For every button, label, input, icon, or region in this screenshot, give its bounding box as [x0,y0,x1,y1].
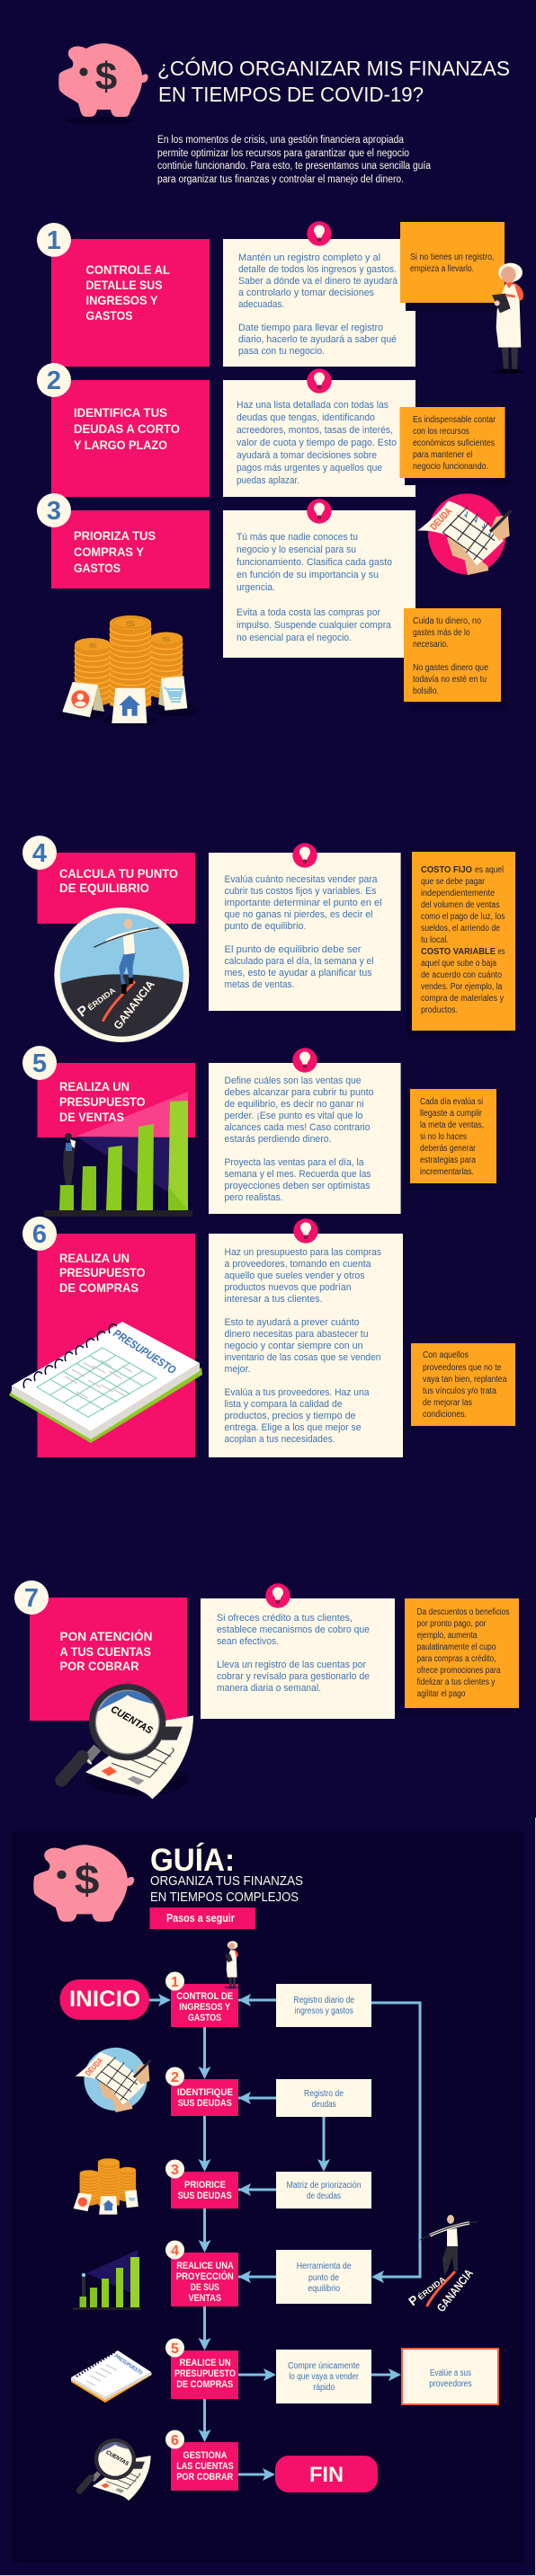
panel: step 3 text: Evita a toda costa las compras por [237,607,380,618]
callout: step 3: necesario. [413,640,448,650]
icon: small budget notebook [71,2350,152,2403]
callout: step 7: ofrece promociones para [417,1666,501,1676]
flow step 5: REALICE UN [180,2358,231,2368]
callout: step 4 [406,852,515,1038]
flow note 3: de deudas [307,2191,341,2201]
panel: step 1 text: pasa con tu negocio. [238,346,325,357]
end pill: FIN [309,2463,344,2487]
icon: small balance walker: P [406,2292,421,2308]
flow step 6: POR COBRAR [176,2472,233,2483]
callout: step 6: vaya tan bien, replantea [423,1375,507,1385]
flow note 5: lo que vaya a vender [289,2372,359,2382]
intro text: En los momentos de crisis, una gestión financiera apropiada [157,135,405,146]
panel: step 5 text: proyecciones deben ser optimistas [225,1181,371,1191]
callout: step 7: por pronto pago, por [417,1619,487,1629]
panel: step 5 heading: DE VENTAS [59,1110,124,1124]
panel: step 7 heading: 7 [24,1584,39,1613]
panel: step 4 text: mes, esto te ayudar a planificar tus [225,968,372,978]
panel: step 2 text: puedas aplazar. [237,475,299,486]
flow step 4: REALICE UNA [176,2261,234,2271]
flow step 3 [165,2160,238,2209]
intro text: permite optimizar los recursos para garantizar que el negocio [157,148,409,159]
callout: step 1: empieza a llevarlo. [410,264,474,274]
icon: small budget notebook: PRESUPUESTO [113,2354,143,2377]
panel: step 4 text: punto de equilibrio. [225,921,306,932]
panel: step 2 text: deudas que tengas, identificando [237,412,375,423]
panel: step 4 text: que no ganas ni pierdes, es decir el [225,909,372,920]
icon: small magnifier: CUENTAS [105,2449,130,2467]
panel: step 6 text: aquello que sueles vender y otros [225,1270,365,1281]
callout: step 4: COSTO FIJO [421,864,472,875]
panel: step 1 text: adecuadas. [238,299,284,310]
flow note 5 [276,2350,371,2403]
flow note 3 [276,2172,371,2209]
panel: step 6 text: acoplan a tus necesidades. [225,1434,335,1445]
panel: step 4 text: calculado para el día, la semana y el [225,956,374,967]
flow step 1: GASTOS [188,2013,221,2023]
callout: step 5: Cada día evalúa si [420,1097,483,1107]
panel: step 4 text [209,843,401,1011]
panel: step 1 text: Saber a dónde va el dinero te ayudará [238,276,398,287]
panel: step 6 heading: DE COMPRAS [59,1280,138,1295]
panel: step 6 heading: 6 [32,1220,47,1249]
panel: step 6 heading: REALIZA UN [59,1251,130,1265]
panel: step 5 text: perder. ¡Ese punto es vital que lo [225,1111,363,1121]
start pill: INICIO [69,1987,140,2012]
callout: step 2: con los recursos [413,427,469,437]
panel: step 2 heading: Y LARGO PLAZO [74,438,167,452]
panel: guide background [12,1831,524,2563]
icon: small coin stacks [74,2158,138,2215]
panel: step 1 heading [37,223,210,367]
panel: step 3 text [223,499,415,658]
panel: step 4 heading: CALCULA TU PUNTO [59,866,178,881]
guide title: EN TIEMPOS COMPLEJOS [150,1890,299,1905]
icon: debt sheet [417,493,511,575]
icon: magnifier over accounts: CUENTAS [109,1704,155,1737]
panel: step 5 heading: PRESUPUESTO [59,1094,146,1109]
flow step 2: IDENTIFIQUE [177,2087,233,2098]
flow step 4: 4 [171,2244,179,2259]
panel: step 4 heading [22,836,195,924]
panel: step 2 text: pagos más urgentes y aquellos que [237,463,382,474]
panel: step 5 text: Proyecta las ventas para el día, la [225,1157,364,1168]
flow step 5: PRESUPUESTO [174,2368,236,2379]
intro text [157,135,432,185]
flow step 4: VENTAS [189,2293,221,2304]
end pill [275,2456,378,2492]
guide title: ORGANIZA TUS FINANZAS [150,1873,303,1889]
callout: step 4: COSTO VARIABLE [421,946,496,957]
callout: step 4: vendes. Por ejemplo, la [421,982,503,992]
callout: step 7 [399,1598,519,1715]
callout: step 6 [406,1343,515,1433]
icon: chef with clipboard [491,263,524,374]
panel: step 6 text: negocio y contar siempre con un [225,1341,363,1351]
panel: step 6 text: productos, precios y tiempo de [225,1411,356,1421]
intro text: continúe funcionando. Para esto, te presentamos una sencilla guía [157,161,432,172]
callout: step 4: aquel que sube o baja [421,959,496,969]
callout: step 4: es [498,947,505,957]
callout: step 1 [400,222,511,311]
panel: step 2 heading: DEUDAS A CORTO [74,421,180,436]
flow note 3: Matriz de priorización [287,2181,362,2191]
panel: step 1 text: Date tiempo para llevar el registro [238,323,383,333]
icon: small debt sheet: DEUDA [84,2056,105,2077]
panel: step 4 text: importante determinar el punto en el [225,898,381,908]
panel: step 6 text [209,1218,403,1457]
callout: step 2: Es indispensable contar [413,415,496,425]
flow note 5: rápido [313,2383,335,2393]
callout: step 6: Con aquellos [423,1350,469,1360]
callout: step 5 [405,1089,496,1191]
guide title: GUÍA: [150,1842,235,1878]
panel: step 1 text: a controlarlo y tomar decisiones [238,288,374,298]
panel: step 3 text: impulso. Suspende cualquier compra [237,620,392,631]
icon: coin stacks with signs: $ [162,635,171,643]
callout: step 6: condiciones. [423,1410,467,1420]
title: ¿CÓMO ORGANIZAR MIS FINANZAS [157,57,510,80]
icon: balance circle: P [75,1003,92,1021]
panel: step 7 text [201,1583,395,1719]
callout: step 3: bolsillo. [413,686,439,696]
guide subtitle tag [149,1908,255,1929]
flow step 1 [165,1971,238,2027]
callout: step 6: proveedores que no te [423,1363,502,1373]
flow step 6: LAS CUENTAS [176,2461,234,2472]
icon: small magnifier [79,2439,151,2501]
flow step 5: DE COMPRAS [176,2379,233,2390]
icon: small chef [224,1941,238,1988]
panel: step 6 text: mejor. [225,1364,250,1375]
callout: step 4: productos. [421,1005,458,1015]
callout: step 4: de acuerdo con cuánto [421,970,502,980]
callout: step 3: todavía no esté en tu [413,675,487,685]
panel: step 4 text: Evalúa cuánto necesitas vender para [225,874,378,885]
icon: piggy bank [58,43,148,124]
panel: step 2 text: ayudará a tomar decisiones sobre [237,450,377,461]
panel: step 6 text: inventario de las cosas que se venden [225,1352,381,1363]
panel: step 7 heading: PON ATENCIÓN [59,1628,153,1643]
chart: small sales bars [72,2250,141,2310]
panel: step 5 text: estarás perdiendo dinero. [225,1134,331,1145]
panel: step 2 heading: 2 [47,367,61,395]
flow note 6: evaluate providers [402,2349,498,2404]
panel: step 4 text: metas de ventas. [225,979,295,990]
callout: step 4: es aquel [475,865,504,875]
flow note 2: deudas [312,2100,336,2110]
panel: step 6 text: Evalúa a tus proveedores. Haz una [225,1387,370,1398]
panel: step 6 text: productos nuevos que podrían [225,1282,351,1293]
flow connectors [149,1994,420,2481]
panel: step 4 heading: 4 [32,839,47,868]
icon: budget notebook: PRESUPUESTO [111,1327,178,1377]
panel: step 6 text: interesar a tus clientes. [225,1294,322,1305]
icon: piggy bank: $ [95,55,117,99]
flow step 1: 1 [171,1975,179,1990]
flow note 4: equilibrio [308,2284,341,2294]
panel: step 7 text: Si ofreces crédito a tus clientes, [217,1613,353,1624]
callout: step 7: ejemplo, aumenta [417,1631,478,1641]
flow step 2 [165,2067,238,2116]
icon: coin stacks with signs [58,615,199,726]
panel: step 7 text: manera diaria o semanal. [217,1683,321,1694]
callout: step 4: del volumen de ventas [421,900,500,910]
callout: step 4: como el pago de luz, los [421,912,505,922]
panel: step 7 heading: POR COBRAR [59,1659,138,1673]
flow step 1: INGRESOS Y [179,2002,231,2013]
panel: step 7 text: Lleva un registro de las cuentas por [217,1660,366,1670]
guide subtitle tag: Pasos a seguir [166,1911,235,1925]
intro text: para organizar tus finanzas y controlar el manejo del dinero. [157,174,404,185]
panel: step 1 heading: CONTROLE AL [86,262,170,277]
callout: step 7: para compras a crédito, [417,1654,496,1664]
panel: step 6 text: dinero necesitas para abastecer tu [225,1329,369,1340]
flow step 5 [165,2338,238,2399]
panel: step 2 text: valor de cuota y tiempo de pago. Esto [237,438,397,448]
flow note 2 [276,2079,371,2117]
flow note 1 [276,1984,371,2027]
callout: step 1: Si no tienes un registro, [410,252,495,262]
panel: step 5 heading: REALIZA UN [59,1079,130,1093]
panel: step 4 text: El punto de equilibrio debe ser [225,944,362,955]
flow step 6: GESTIONA [183,2450,227,2461]
panel: step 7 heading: A TUS CUENTAS [59,1644,151,1659]
panel: step 3 text: en función de su importancia y su [237,570,379,580]
title: EN TIEMPOS DE COVID-19? [158,83,424,106]
panel: step 3 text: Tú más que nadie conoces tu [237,532,358,543]
panel: step 4 heading: DE EQUILIBRIO [59,881,149,895]
flow step 4: DE SUS [191,2282,219,2293]
panel: step 5 text: debes alcanzar para cubrir tu punto [225,1087,374,1098]
callout: step 7: paulatinamente el cupo [417,1642,496,1652]
panel: step 5 text: pero realistas. [225,1192,282,1203]
panel: step 1 heading: GASTOS [86,308,133,323]
panel: step 1 heading: INGRESOS Y [86,293,158,307]
start pill [59,1979,149,2020]
panel: step 3 text: funcionamiento. Clasifica cada gasto [237,557,392,568]
flow step 2: 2 [171,2070,179,2085]
panel: step 5 text: semana y el mes. Recuerda que las [225,1169,371,1180]
icon: guide piggy bank: $ [75,1857,100,1903]
flow step 1: CONTROL DE [176,1991,233,2002]
chart: growing sales bars [44,1101,192,1217]
flow note 6: evaluate providers: Evalúe a sus [430,2368,471,2378]
callout: step 7: fidelizar a tus clientes y [417,1677,495,1687]
flow step 3: 3 [171,2163,179,2178]
callout: step 2 [399,407,510,485]
icon: balance circle: ÉRDIDA [86,985,118,1013]
panel: step 1 text: diario, hacerlo te ayudará a saber qué [238,334,397,345]
panel: step 7 text: establece mecanismos de cobro que [217,1624,370,1635]
panel: step 3 heading: GASTOS [74,561,121,575]
panel: step 3 heading: COMPRAS Y [74,544,145,559]
panel: step 7 heading [14,1580,187,1721]
callout: step 5: estrategias para [420,1155,476,1165]
panel: step 1 text: detalle de todos los ingresos y gastos. [238,264,397,275]
callout: step 5: deberás generar [420,1144,477,1154]
panel: step 3 heading: PRIORIZA TUS [74,528,156,543]
flow step 3: PRIORICE [184,2180,226,2191]
callout: step 2: negocio funcionando. [413,462,488,472]
title [157,57,510,106]
callout: step 5: incrementarlas. [420,1167,474,1177]
panel: step 3 text: urgencia. [237,582,275,593]
flow note 4: punto de [308,2273,339,2283]
icon: small balance walker: GANANCIA [434,2266,476,2315]
callout: step 3: No gastes dinero que [413,663,488,673]
flow step 2: SUS DEUDAS [178,2098,232,2109]
flow step 6 [165,2430,238,2491]
flow note 6: evaluate providers: proveedores [429,2379,472,2389]
flow note 5: Compre únicamente [288,2361,360,2371]
panel: step 6 heading: PRESUPUESTO [59,1265,146,1279]
flow note 1: Registro diario de [293,1996,355,2005]
callout: step 4: que se debe pagar [421,877,486,887]
guide title [150,1842,303,1905]
icon: small balance walker [406,2215,478,2315]
panel: step 5 text [209,1048,401,1214]
callout: step 7: agilitar el pago [417,1689,466,1699]
panel: step 6 text: entrega. Elige a los que mejor se [225,1422,362,1433]
flow step 4: PROYECCIÓN [176,2271,234,2282]
callout: step 7: Da descuentos o beneficios [417,1607,509,1617]
panel: step 4 text: cubrir tus costos fijos y variables. Es [225,886,377,897]
callout: step 3: gastes más de lo [413,628,470,638]
panel: step 6 text: a proveedores, tomando en cuenta [225,1259,371,1270]
icon: coin stacks with signs: $ [126,620,136,628]
flow note 4: Herramienta de [297,2262,352,2271]
icon: magnifier over accounts [61,1684,193,1799]
panel: step 3 text: negocio y lo esencial para su [237,544,356,555]
panel: step 6 text: Esto te ayudará a prever cuánto [225,1317,360,1328]
callout: step 4: compra de materiales y [421,994,504,1004]
callout: step 2: económicos suficientes [413,438,495,448]
icon: balance circle: GANANCIA [112,978,157,1031]
flow step 5: 5 [171,2341,179,2357]
panel: step 1 heading: 1 [47,226,61,255]
callout: step 5: si no lo haces [420,1132,467,1142]
flow step 6: 6 [171,2433,179,2448]
callout: step 4: sueldos, el arriendo de [421,924,500,934]
panel: step 7 text: cobrar y revísalo para gestionarlo de [217,1671,370,1682]
flow step 3: SUS DEUDAS [178,2191,232,2201]
panel: step 5 text: de equilibrio, es decir no ganar ni [225,1099,363,1110]
panel: step 2 text: Haz una lista detallada con todas las [237,400,389,411]
panel: step 7 text: sean efectivos. [217,1636,279,1647]
icon: budget notebook [9,1322,202,1443]
callout: step 4: tu local. [421,935,449,945]
panel: step 3 heading [37,493,210,589]
panel: step 3 heading: 3 [47,497,61,526]
callout: step 3: Cuida tu dinero, no [413,616,481,626]
icon: balance circle [54,907,189,1042]
callout: step 6: tus vínculos y/o trata [423,1386,496,1396]
panel: step 6 text: Haz un presupuesto para las compras [225,1247,381,1258]
panel: step 6 heading [22,1217,195,1457]
icon: coin stacks with signs: $ [88,642,97,650]
callout: step 4: independientemente [421,889,495,899]
flow note 4 [276,2250,371,2304]
panel: step 1 text [223,221,415,367]
panel: step 5 text: alcances cada mes! Caso contrario [225,1122,371,1133]
panel: step 5 text: Define cuáles son las ventas que [225,1076,362,1086]
panel: step 6 text: lista y compara la calidad de [225,1399,342,1410]
flow step 4 [165,2241,238,2306]
panel: step 5 heading: 5 [32,1049,47,1078]
callout: step 6: de mejorar las [423,1398,472,1408]
panel: step 2 heading: IDENTIFICA TUS [74,405,167,420]
icon: guide piggy bank [33,1845,134,1922]
flow note 2: Registro de [304,2089,344,2099]
icon: debt sheet: DEUDA [428,506,454,533]
callout: step 5: la meta de ventas, [420,1120,484,1130]
panel: step 3 text: no esencial para el negocio. [237,633,352,643]
icon: small balance walker: ÉRDIDA [416,2275,447,2302]
panel: step 1 heading: DETALLE SUS [86,278,162,292]
callout: step 5: llegaste a cumplir [420,1109,483,1119]
panel: step 2 heading [37,363,210,497]
flow note 1: ingresos y gastos [295,2006,353,2016]
panel: step 5 heading [22,1046,195,1138]
icon: small debt sheet [75,2048,151,2112]
panel: step 2 text: acreedores, montos, tasas de interés, [237,425,393,436]
callout: step 2: para mantener el [413,450,473,460]
panel: step 1 text: Mantén un registro completo y al [238,252,380,263]
panel: step 2 text [223,368,415,497]
callout: step 3 [404,608,506,710]
